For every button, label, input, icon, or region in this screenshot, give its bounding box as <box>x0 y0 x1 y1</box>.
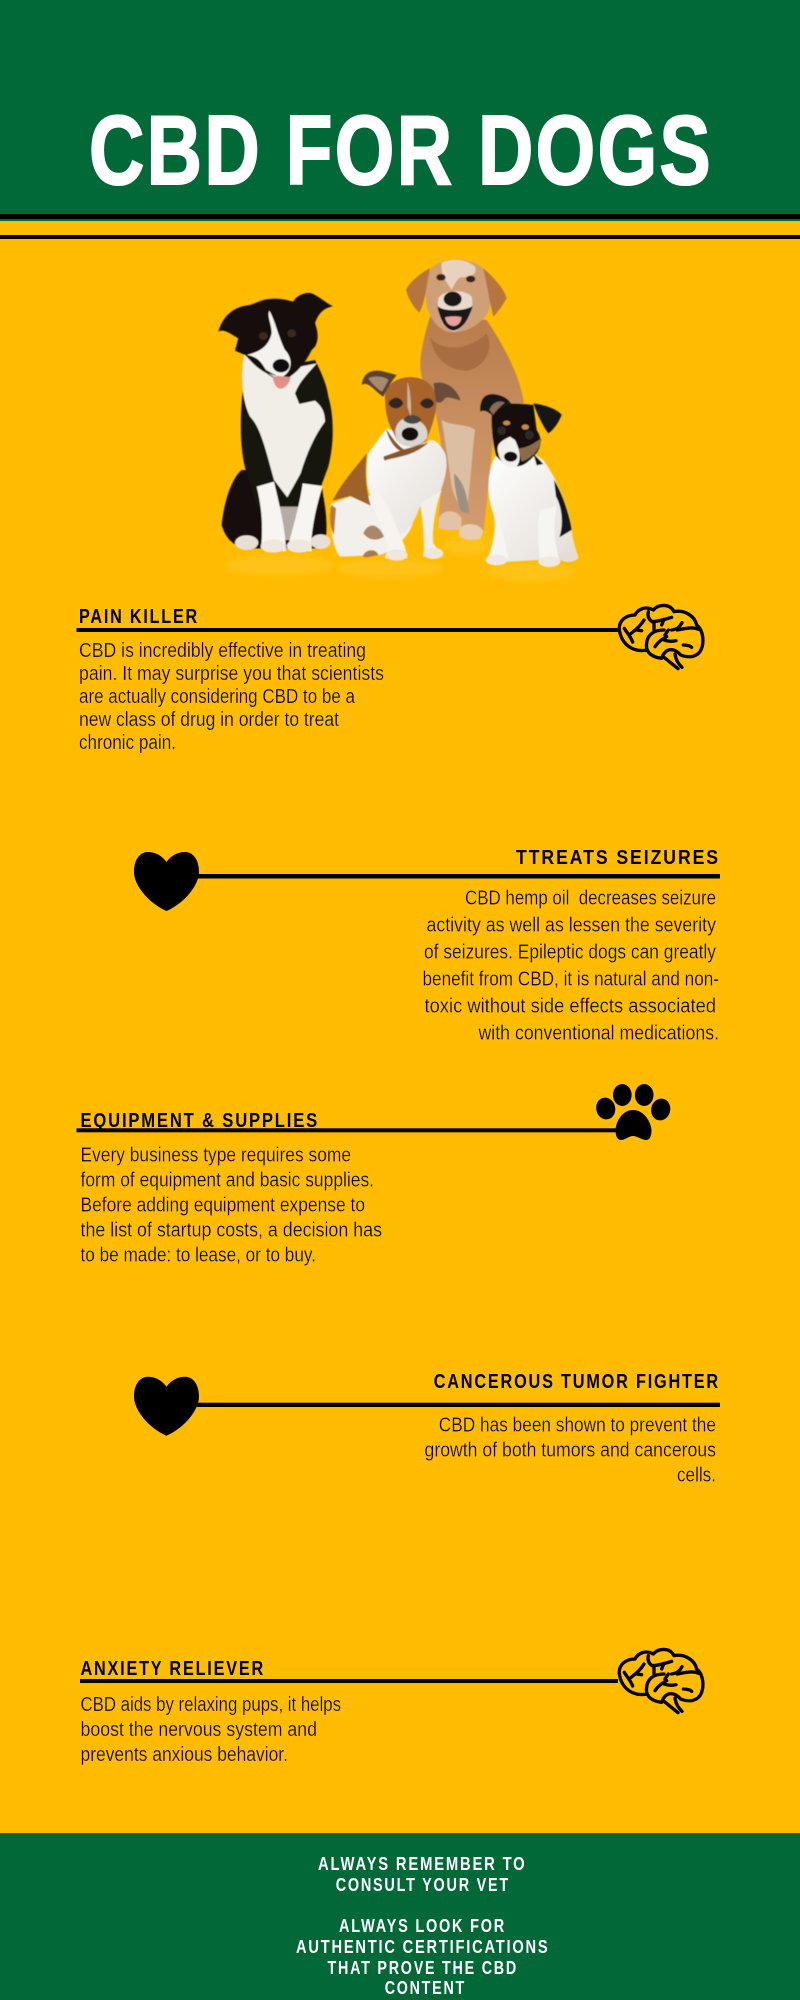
panel: cancerous tumor fighter <box>134 1371 720 1487</box>
body text: of seizures. Epileptic dogs can greatly <box>424 942 716 964</box>
heading: EQUIPMENT & SUPPLIES <box>80 1110 319 1132</box>
icon: paw <box>594 1084 673 1140</box>
puppy dog <box>480 394 578 567</box>
body text <box>79 640 384 754</box>
border collie dog <box>218 293 333 553</box>
body text: to be made: to lease, or to buy. <box>80 1245 316 1267</box>
footer text: certifications: AUTHENTIC CERTIFICATIONS <box>296 1937 550 1957</box>
body text: form of equipment and basic supplies. <box>80 1170 374 1192</box>
body text: growth of both tumors and cancerous <box>424 1440 716 1462</box>
heading: CANCEROUS TUMOR FIGHTER <box>434 1371 720 1393</box>
body text <box>80 1145 382 1267</box>
panel: pain killer <box>76 605 703 754</box>
body text <box>424 1415 716 1487</box>
body text <box>80 1694 341 1766</box>
icon: heart <box>134 852 199 911</box>
body text: prevents anxious behavior. <box>80 1744 288 1766</box>
header banner <box>0 0 800 239</box>
body text: benefit from CBD, it is natural and non- <box>422 968 719 990</box>
body text: CBD hemp oil decreases seizure <box>465 888 716 910</box>
dogs illustration <box>218 259 578 580</box>
footer text: certifications: THAT PROVE THE CBD <box>328 1958 518 1978</box>
jack russell dog <box>330 371 461 561</box>
footer text: consult your vet: ALWAYS REMEMBER TO <box>318 1854 526 1874</box>
body text: new class of drug in order to treat <box>79 709 339 731</box>
footer text: certifications: CONTENT <box>385 1978 466 1998</box>
body text: toxic without side effects associated <box>424 996 716 1018</box>
body text: Every business type requires some <box>80 1145 351 1167</box>
footer text: certifications <box>296 1916 550 1998</box>
body text: CBD has been shown to prevent the <box>439 1415 716 1437</box>
body text: pain. It may surprise you that scientists <box>79 663 384 685</box>
footer text: consult your vet <box>318 1854 526 1895</box>
heading: ANXIETY RELIEVER <box>80 1658 265 1680</box>
body text: CBD is incredibly effective in treating <box>79 640 366 662</box>
body text: boost the nervous system and <box>80 1719 317 1741</box>
heading: TTREATS SEIZURES <box>516 847 720 869</box>
footer text: consult your vet: CONSULT YOUR VET <box>336 1875 510 1895</box>
icon: brain <box>619 1649 703 1713</box>
body text: CBD aids by relaxing pups, it helps <box>80 1694 341 1716</box>
body text: Before adding equipment expense to <box>80 1195 365 1217</box>
footer text: certifications: ALWAYS LOOK FOR <box>339 1916 506 1936</box>
body text: the list of startup costs, a decision has <box>80 1220 382 1242</box>
body text: activity as well as lessen the severity <box>426 914 716 936</box>
heading: PAIN KILLER <box>79 606 199 628</box>
body text: with conventional medications. <box>478 1022 719 1044</box>
panel: treats seizures <box>134 847 720 1044</box>
golden dog <box>406 259 524 540</box>
footer banner <box>0 1833 800 2000</box>
icon: heart <box>134 1377 199 1436</box>
icon: brain <box>619 605 703 669</box>
panel: equipment and supplies <box>76 1084 673 1267</box>
panel: anxiety reliever <box>80 1649 703 1766</box>
body text: chronic pain. <box>79 732 176 754</box>
body text <box>422 888 719 1044</box>
body text: are actually considering CBD to be a <box>79 686 356 708</box>
floor reflection <box>227 536 573 580</box>
body text: cells. <box>677 1465 716 1487</box>
